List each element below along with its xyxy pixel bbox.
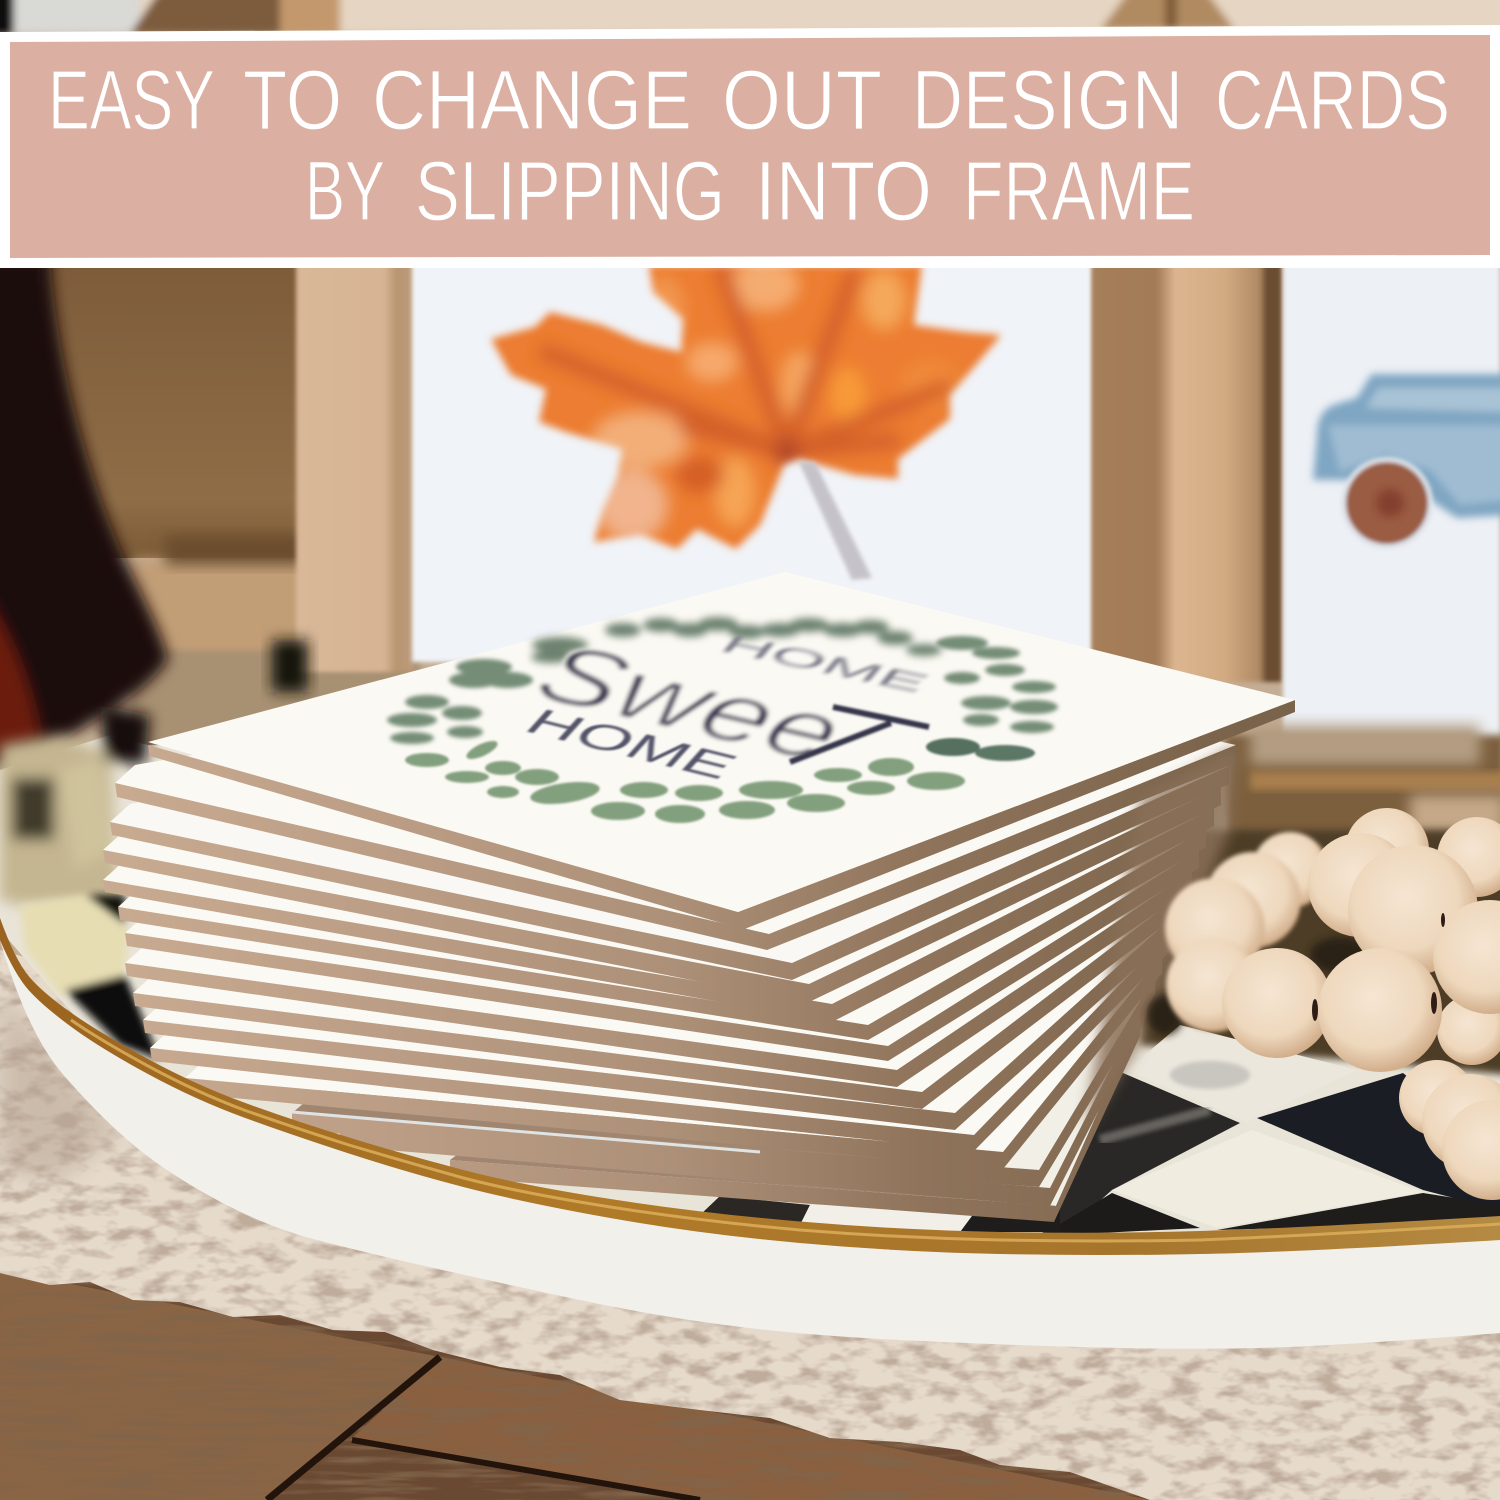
bead shadow gaps <box>1147 937 1370 1035</box>
far side of stack <box>1085 745 1238 1130</box>
banner headline: SLIPPING <box>415 144 725 238</box>
checkerboard blocks near rim <box>20 895 160 1060</box>
banner headline: CHANGE <box>372 53 692 147</box>
banner headline: OUT <box>722 53 882 147</box>
icon: blue truck <box>1313 374 1500 518</box>
headline banner <box>0 25 1500 268</box>
truck wheel <box>1341 457 1433 549</box>
wooden bead garland <box>1147 808 1500 1200</box>
banner pink panel <box>10 35 1490 258</box>
top strip above banner <box>0 0 1500 34</box>
wreath lettering <box>516 627 936 787</box>
tray back wall <box>1225 725 1500 860</box>
right wooden frame post <box>1092 262 1282 682</box>
stack of design cards <box>103 572 1295 1222</box>
left wooden frame post <box>296 262 414 672</box>
wooden table <box>0 1250 1500 1500</box>
top card with wreath <box>148 572 1295 930</box>
banner headline <box>48 53 1450 238</box>
dark floor behind beads <box>1140 830 1500 1075</box>
banner headline: BY <box>305 144 385 238</box>
tray white outer wall <box>0 940 1500 1349</box>
rear blurred beads <box>1165 832 1328 1032</box>
wreath lettering: HOME <box>714 630 936 697</box>
white card with maple leaf <box>412 259 1092 662</box>
banner headline: DESIGN <box>912 53 1183 147</box>
checkerboard pattern left <box>0 705 150 905</box>
tray interior <box>0 735 1500 1250</box>
wreath lettering: HOME <box>516 701 747 787</box>
round tray <box>0 705 1500 1250</box>
wreath lettering: Swee <box>521 627 859 780</box>
woven rug <box>0 950 1500 1500</box>
bead holes <box>1312 913 1445 1021</box>
icon: eucalyptus wreath sides <box>387 636 1058 744</box>
thin line in lower cards <box>292 1112 760 1152</box>
front beads <box>1222 808 1500 1200</box>
background wall <box>0 0 1500 1100</box>
right card with blue truck <box>1283 262 1500 792</box>
rim highlight <box>71 1020 1500 1241</box>
icon: maple leaf <box>480 259 1010 560</box>
tray rim and wall <box>0 918 1500 1349</box>
dark drape at left <box>0 255 168 770</box>
banner headline: TO <box>243 53 342 147</box>
banner headline: EASY <box>48 53 215 147</box>
dark shape behind stack corner <box>272 640 308 692</box>
letter t flourish <box>790 707 929 762</box>
banner white border <box>0 25 1500 268</box>
leaf stem <box>799 462 872 580</box>
icon: eucalyptus wreath top <box>531 617 942 663</box>
lower card layers <box>103 650 1236 1222</box>
banner headline: INTO <box>755 144 932 238</box>
tray gold rim <box>0 918 1500 1255</box>
checkerboard pattern right <box>700 1025 1500 1240</box>
icon: eucalyptus wreath bottom <box>405 737 1035 823</box>
banner headline: FRAME <box>963 144 1195 238</box>
